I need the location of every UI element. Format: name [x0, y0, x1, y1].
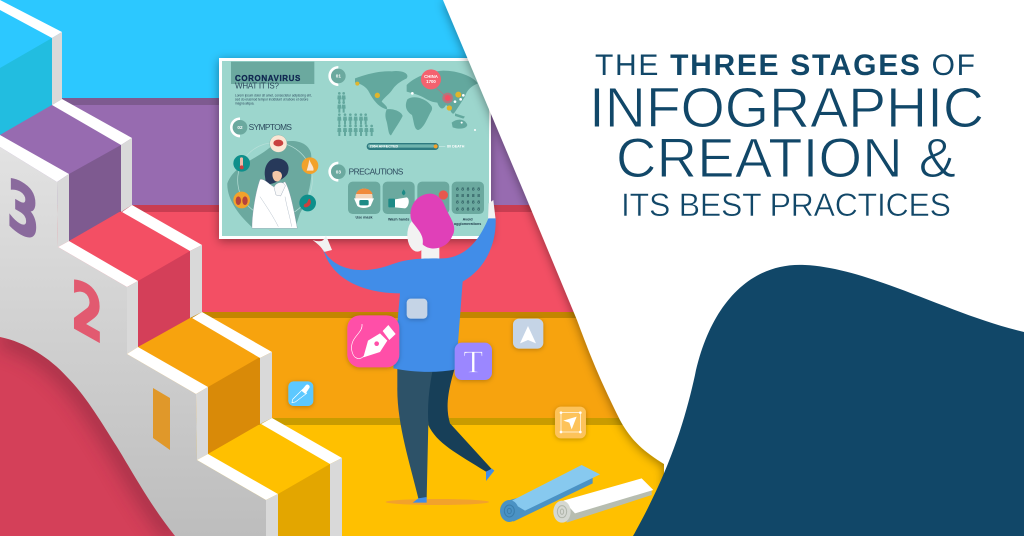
precaution card: avoid agglomerations: agglomerations	[454, 222, 481, 226]
affected progress bar: 80 DEATH	[447, 145, 465, 149]
precaution card: avoid agglomerations: 88888	[456, 200, 480, 206]
poster: coronavirus infographic	[219, 58, 491, 239]
world map	[355, 71, 478, 135]
icon: lungs	[233, 192, 250, 208]
precaution card: mask: Use mask	[355, 216, 374, 220]
people pictogram	[337, 92, 374, 136]
poster heading: CORONAVIRUS	[235, 74, 301, 83]
poster heading: WHAT IT IS?	[235, 81, 280, 90]
blue sweater with arms	[323, 218, 496, 372]
stair 1: orange step	[127, 312, 272, 460]
section badge 02 and heading: SYMPTOMS	[249, 122, 292, 132]
icon: nose	[302, 157, 318, 174]
number 1	[153, 388, 170, 450]
section badge 03 and heading: 03	[336, 169, 341, 174]
poster intro text: Lorem ipsum dolor sit amet, consectetur adipiscing elit,	[235, 94, 312, 98]
icon: text tool: T	[464, 344, 483, 380]
red wave at lower left	[0, 337, 175, 536]
stair 0: yellow step	[197, 418, 342, 536]
stair 4: cyan top step	[0, 0, 62, 135]
shoes	[413, 469, 494, 503]
poster intro text	[235, 94, 312, 106]
stair 3: purple step	[0, 99, 132, 247]
poster intro text: magna aliqua.	[235, 102, 254, 106]
ground shadow	[386, 499, 489, 505]
icon: pen tool	[347, 315, 399, 367]
white diagonal panel	[443, 0, 1024, 536]
precaution card: wash hands	[383, 182, 415, 221]
head	[407, 218, 427, 252]
icon: brain	[270, 135, 287, 152]
section badge 03 and heading: PRECAUTIONS	[349, 167, 404, 177]
icon: text tool	[455, 343, 492, 380]
icon: transform arrow	[555, 407, 586, 438]
title: ITS BEST PRACTICES	[621, 187, 951, 223]
section badge 02 and heading	[230, 117, 292, 137]
map markers and China callout	[355, 69, 476, 131]
section badge 01: 01	[336, 74, 341, 79]
stair wall	[0, 147, 266, 536]
hands	[313, 200, 496, 252]
map markers and China callout: CHINA	[424, 74, 439, 79]
section badge 01	[328, 66, 346, 86]
poster heading	[231, 62, 314, 90]
title	[589, 49, 984, 223]
white paper roll	[553, 478, 653, 523]
precaution card: avoid agglomerations: Avoid	[463, 217, 473, 221]
icon: eyedropper	[288, 381, 313, 406]
dark blue hill shape	[633, 265, 1024, 536]
blue paper roll	[500, 465, 600, 522]
section badge 03 and heading	[328, 162, 404, 182]
front leg	[397, 368, 433, 498]
stair 2: red step	[58, 205, 202, 354]
poster content	[227, 62, 484, 228]
back leg	[428, 368, 492, 472]
title: INFOGRAPHIC	[589, 76, 984, 140]
number 3: 3	[7, 163, 39, 260]
staircase	[0, 0, 342, 536]
precaution card: avoid agglomerations: 88888	[456, 206, 480, 212]
affected progress bar: 2964 AFFECTED	[370, 145, 399, 149]
icon: small square	[407, 299, 427, 319]
person and floating tool icons	[288, 194, 653, 523]
precaution card: mask	[348, 182, 380, 220]
section badge 02 and heading: 02	[237, 125, 243, 130]
symptoms ring	[238, 143, 312, 217]
number 2: 2	[71, 264, 103, 361]
precaution card: avoid agglomerations: 88888	[456, 193, 480, 199]
precaution card: contact	[417, 182, 449, 214]
hair	[410, 194, 454, 248]
precaution card: avoid agglomerations: 88888	[456, 186, 480, 192]
map markers and China callout: 1700	[426, 79, 436, 84]
affected progress bar	[367, 143, 465, 150]
symptoms backdrop blob	[227, 141, 312, 228]
precaution card: avoid agglomerations	[452, 182, 484, 226]
icon: navigation arrow	[513, 319, 543, 349]
icon: stomach	[299, 195, 316, 211]
poster intro text: sed do eiusmod tempor incididunt ut labore et dolore	[235, 98, 309, 102]
title: CREATION &	[616, 126, 956, 189]
neck	[421, 245, 439, 260]
title: THE THREE STAGES OF	[595, 49, 975, 82]
poster frame	[219, 58, 491, 239]
precaution card: wash hands: Wash hands	[388, 217, 409, 221]
icon: thermometer	[233, 155, 250, 172]
coughing woman	[252, 158, 297, 228]
